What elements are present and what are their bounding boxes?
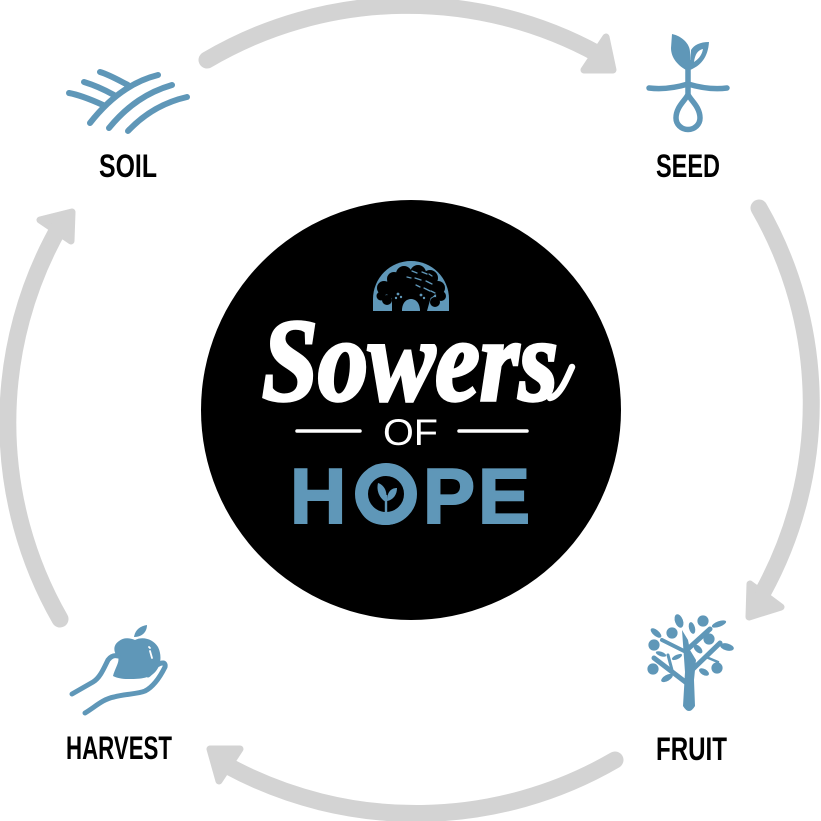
title: Sowers: Sowers	[262, 295, 558, 426]
icon: soil field furrows	[69, 72, 187, 131]
label: harvest: HARVEST	[66, 730, 172, 766]
title: Hope: HOPE	[290, 452, 530, 540]
icon: fruit tree	[647, 613, 735, 711]
panel: central logo	[201, 200, 621, 620]
icon: sprout in O	[377, 483, 397, 512]
label: seed: SEED	[656, 148, 720, 184]
label: soil: SOIL	[99, 148, 157, 184]
label: fruit: FRUIT	[656, 731, 727, 767]
arrow: soil to seed	[207, 5, 613, 70]
subtitle: of with rules: OF	[383, 412, 438, 453]
icon: oak tree arch	[373, 261, 449, 311]
black circle	[201, 200, 621, 620]
arrow: seed to fruit	[749, 208, 811, 617]
arrow: fruit to harvest	[210, 749, 615, 814]
icon: seed sprouting	[649, 34, 727, 130]
arrow: harvest to soil	[8, 212, 72, 619]
icon: hand holding apple	[72, 625, 165, 713]
